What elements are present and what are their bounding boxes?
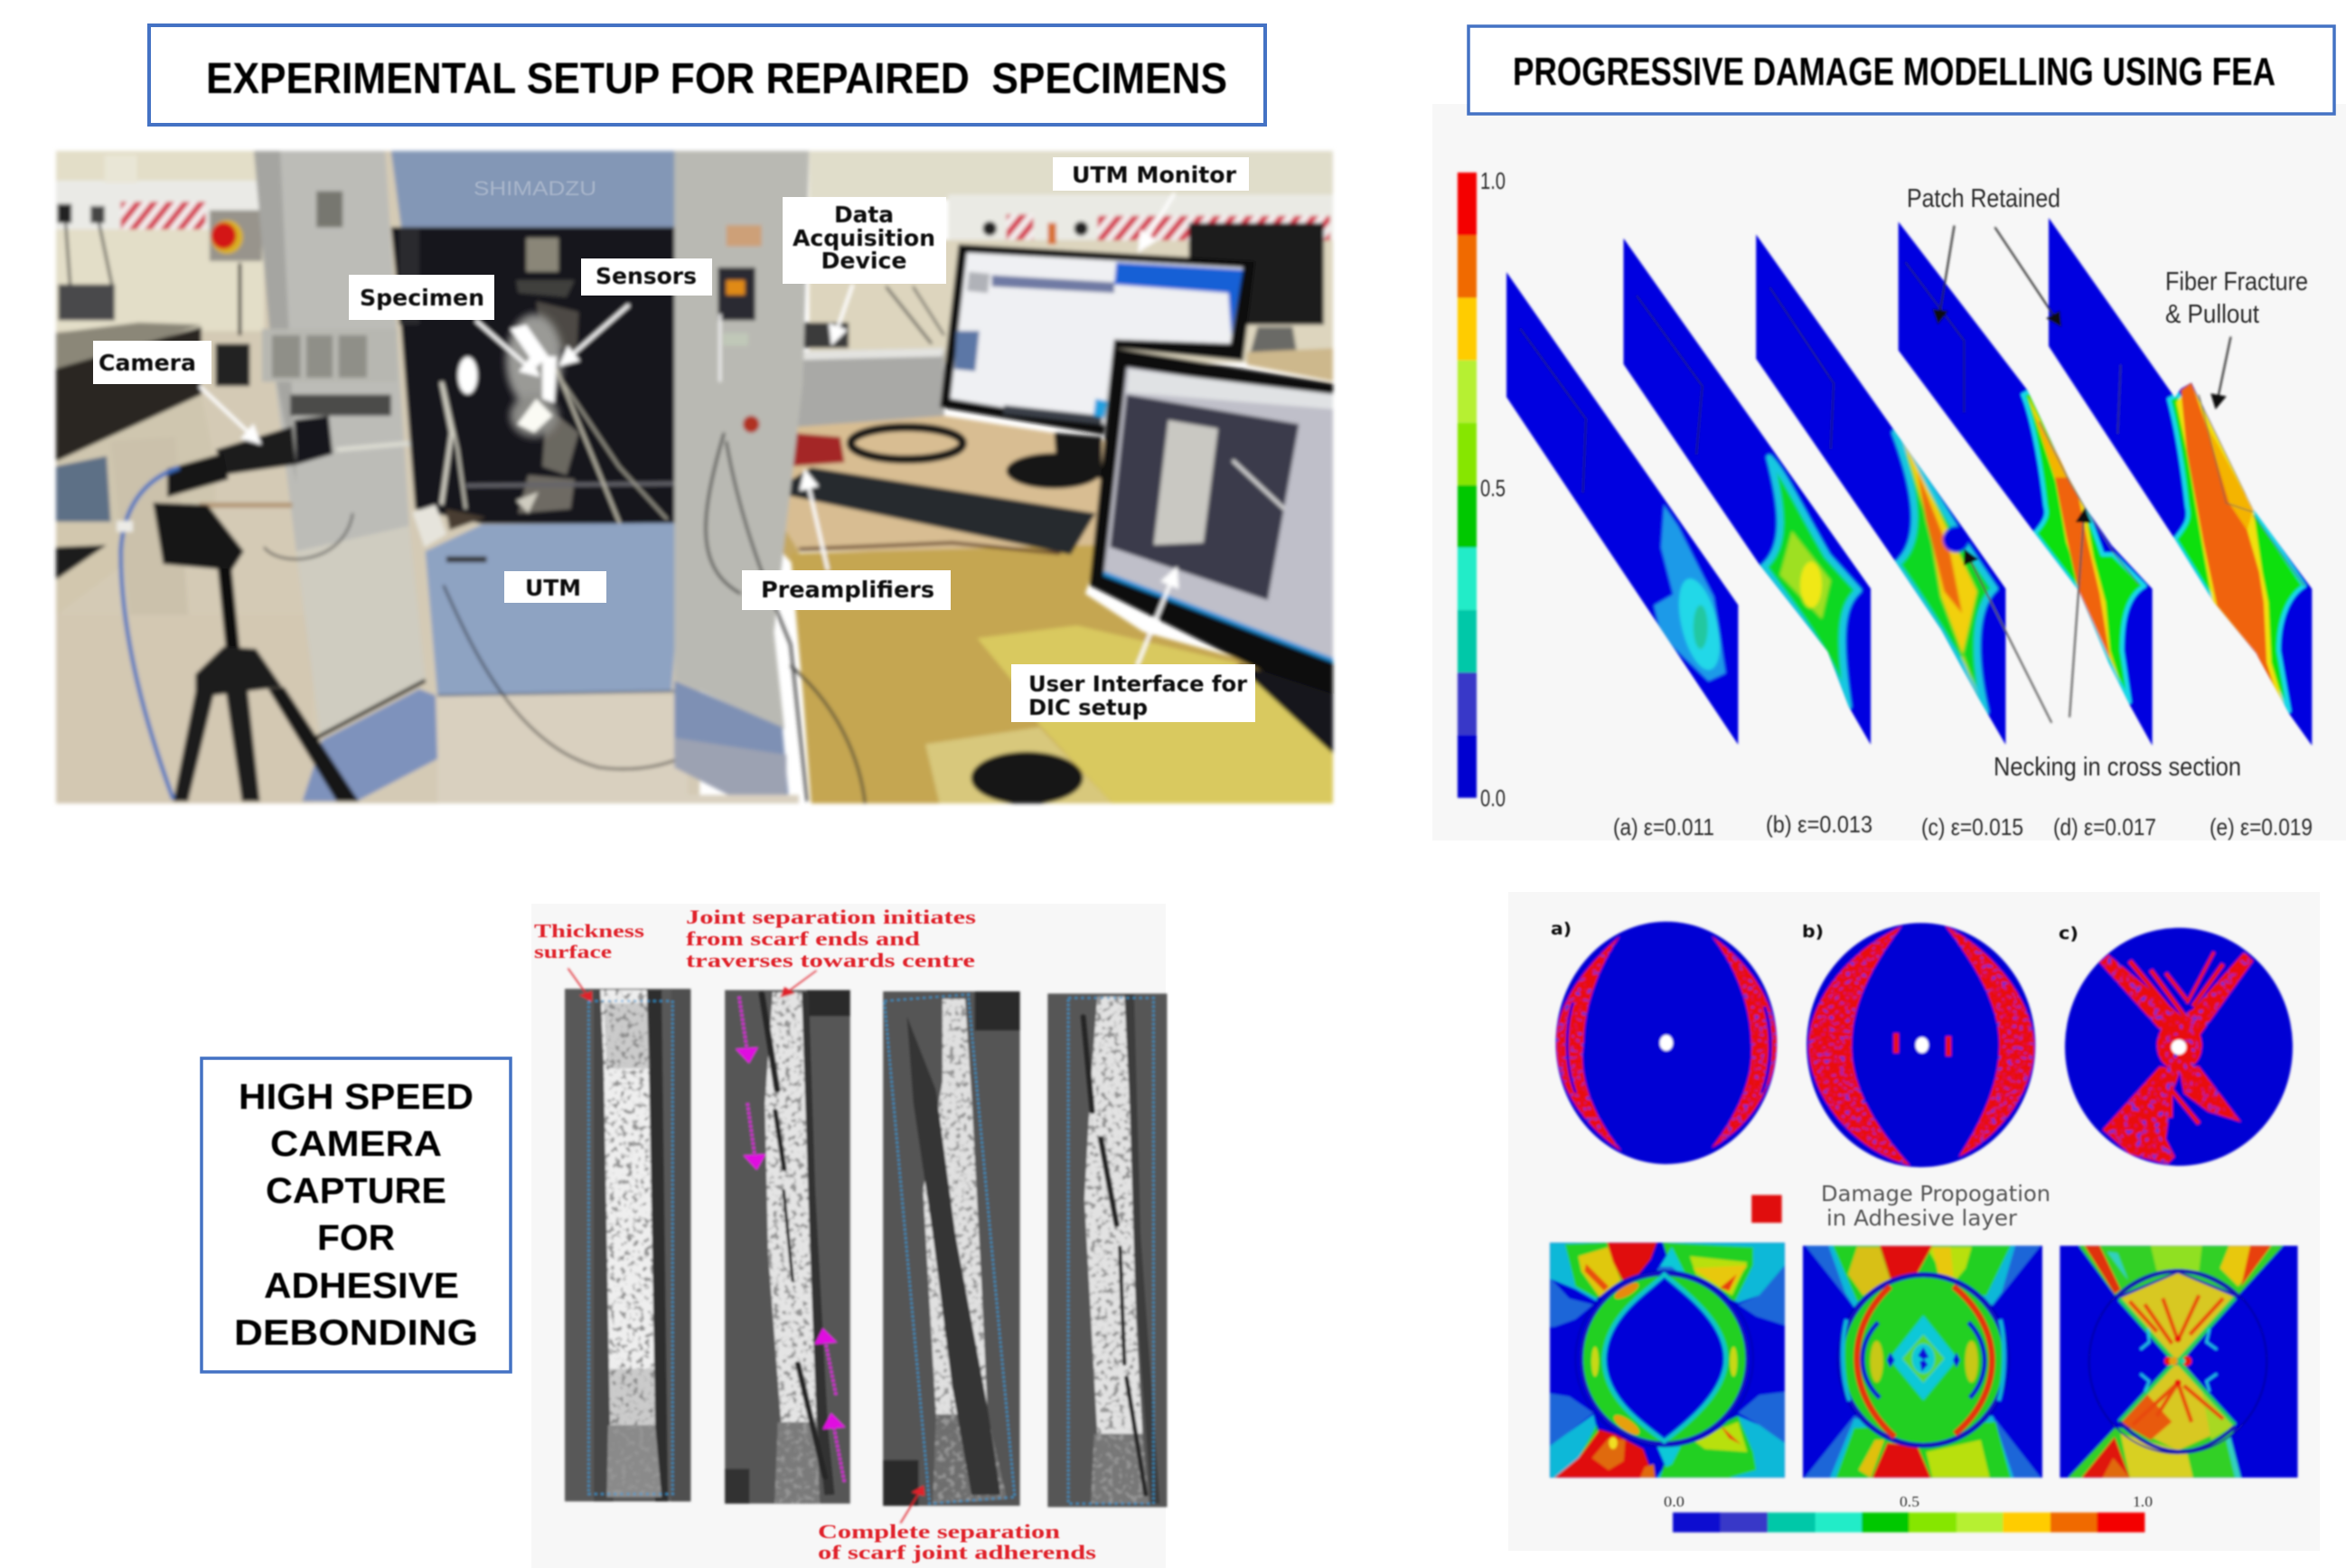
label: User Interface for DIC setup: DIC setup — [1028, 695, 1148, 720]
frame 1 — [565, 989, 690, 1501]
contour square c — [2060, 1245, 2298, 1478]
annotation: thickness surface: surface — [534, 941, 612, 962]
title box: experimental setup — [149, 25, 1265, 125]
FEA scale and callout labels: (b) ε=0.013 — [1766, 811, 1872, 838]
contour square b — [1803, 1245, 2042, 1478]
label: Data Acquisition Device: Device — [821, 248, 907, 274]
legend text: damage propagation: Damage Propogation — [1821, 1181, 2050, 1207]
panel: FEA background — [1432, 104, 2346, 840]
colour scale labels: 0.5 — [1900, 1493, 1919, 1510]
colour scale labels: 1.0 — [2133, 1493, 2153, 1510]
disc labels: a) — [1551, 919, 1572, 939]
frame 2 — [725, 991, 850, 1504]
FEA scale and callout labels: & Pullout — [2165, 300, 2259, 329]
annotation: joint separation — [686, 906, 977, 972]
label: Specimen: Specimen — [360, 285, 484, 311]
label: Data Acquisition Device: Acquisition — [793, 225, 935, 251]
contour square a — [1550, 1243, 1785, 1478]
label: Data Acquisition Device: Data — [834, 202, 894, 228]
annotation: joint separation: Joint separation initiates — [686, 906, 977, 928]
label: UTM — [504, 571, 606, 603]
title box: high speed camera capture: ADHESIVE — [264, 1266, 459, 1306]
label: UTM Monitor — [1053, 157, 1249, 191]
annotation: complete separation: Complete separation — [818, 1520, 1060, 1543]
label: UTM Monitor: UTM Monitor — [1072, 162, 1237, 188]
FEA scale and callout labels: 0.0 — [1480, 784, 1506, 812]
strip (e) — [2049, 218, 2312, 746]
panel: adhesive damage propagation — [1547, 918, 2301, 1535]
frame 4 — [1047, 993, 1167, 1507]
annotation: joint separation: traverses towards centre — [686, 949, 975, 972]
left part of photo: wall, table, camera, tripod, UTM — [54, 145, 699, 822]
FEA scale and callout labels: Fiber Fracture — [2165, 268, 2308, 296]
disc c — [2065, 928, 2293, 1166]
FEA scale and callout labels: (c) ε=0.015 — [1921, 813, 2023, 840]
title box: experimental setup: EXPERIMENTAL SETUP FOR REPAIRED SPECIMENS — [206, 55, 1227, 103]
label: Preamplifiers — [742, 570, 951, 610]
arrows: damage callouts — [1938, 226, 2230, 723]
strip (c) — [1756, 234, 2005, 745]
label: Specimen — [349, 275, 494, 320]
legend text: damage propagation: in Adhesive layer — [1826, 1206, 2017, 1231]
annotation: joint separation: from scarf ends and — [686, 927, 920, 950]
frame 3 — [883, 991, 1020, 1506]
FEA scale and callout labels: (d) ε=0.017 — [2053, 813, 2156, 840]
disc a — [1555, 922, 1777, 1164]
annotation: complete separation — [818, 1520, 1097, 1563]
FEA scale and callout labels: 0.5 — [1480, 474, 1506, 502]
label: Data Acquisition Device — [783, 197, 946, 284]
disc labels: b) — [1802, 922, 1824, 942]
colour scale labels — [1664, 1493, 2153, 1510]
disc labels — [1551, 919, 2079, 944]
machine brand text: SHIMADZU — [474, 177, 596, 200]
colour scale labels: 0.0 — [1664, 1493, 1684, 1510]
right part of photo: column, desk, monitors, keyboard — [674, 145, 1340, 812]
legend text: damage propagation — [1821, 1181, 2050, 1231]
label: Camera — [93, 341, 211, 384]
title box: high speed camera capture — [202, 1058, 511, 1372]
title box: high speed camera capture: HIGH SPEED — [239, 1077, 474, 1117]
title box: high speed camera capture: CAMERA — [270, 1124, 442, 1164]
red pointer arrows — [568, 968, 923, 1523]
title box: high speed camera capture: CAPTURE — [266, 1171, 446, 1211]
strip (b) — [1624, 239, 1871, 745]
annotation: thickness surface — [534, 920, 644, 962]
FEA scale and callout labels: Patch Retained — [1907, 184, 2060, 213]
FEA scale and callout labels: 1.0 — [1480, 167, 1506, 194]
label: Preamplifiers: Preamplifiers — [761, 577, 934, 603]
label: User Interface for DIC setup — [1011, 664, 1255, 722]
annotation: complete separation: of scarf joint adherends — [818, 1541, 1097, 1563]
FEA scale and callout labels: (a) ε=0.011 — [1613, 813, 1714, 840]
title box: high speed camera capture: FOR — [317, 1218, 395, 1258]
title box: high speed camera capture: DEBONDING — [234, 1313, 478, 1353]
FEA scale and callout labels: Necking in cross section — [1994, 753, 2241, 782]
disc labels: c) — [2059, 924, 2079, 944]
horizontal colour scale — [1673, 1513, 2144, 1533]
strip (a) — [1506, 272, 1738, 745]
FEA scale and callout labels: (e) ε=0.019 — [2210, 813, 2313, 840]
label: User Interface for DIC setup: User Interface for — [1028, 671, 1247, 697]
chart: FEA progressive damage strips — [1458, 173, 2312, 798]
label: Sensors: Sensors — [596, 263, 697, 289]
label: UTM: UTM — [525, 575, 581, 601]
annotation: thickness surface: Thickness — [534, 920, 644, 942]
legend swatch: damage — [1751, 1195, 1782, 1223]
colour scale bar — [1458, 173, 1477, 798]
panel: high speed camera frames — [531, 904, 1167, 1568]
label: Camera: Camera — [99, 350, 196, 376]
disc b — [1806, 923, 2035, 1168]
strip (d) — [1899, 221, 2153, 746]
photo: experimental setup with UTM, camera and monitors — [54, 145, 1340, 822]
label: Sensors — [581, 258, 712, 296]
FEA scale and callout labels — [1480, 167, 2313, 840]
title box: progressive damage modelling — [1469, 26, 2334, 114]
